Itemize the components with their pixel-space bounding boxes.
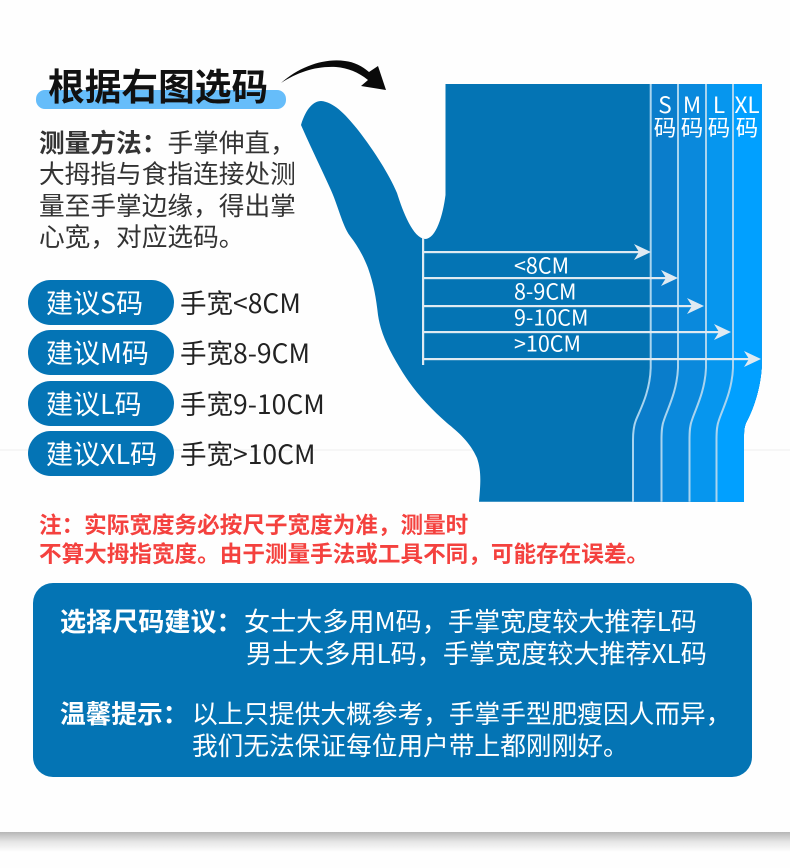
red note: 不算大拇指宽度。由于测量手法或工具不同，可能存在误差。 <box>39 536 649 568</box>
text block: measuring method <box>39 123 296 254</box>
text block: measuring method: 心宽，对应选码。 <box>39 217 244 254</box>
panel: advice: 男士大多用L码，手掌宽度较大推荐XL码 <box>246 633 707 671</box>
recommendation M: 手宽8-9CM <box>180 332 310 371</box>
tips text <box>60 694 731 763</box>
panel: advice: 以上只提供大概参考，手掌手型肥瘦因人而异， <box>192 694 731 731</box>
size labels: S <box>658 88 672 120</box>
recommendation M: 建议M码 <box>46 332 149 371</box>
size labels: XL <box>734 88 760 120</box>
range labels: >10CM <box>514 328 581 358</box>
size advice text <box>60 601 707 671</box>
bottom shadow <box>0 832 790 852</box>
text block: measuring method: 大拇指与食指连接处测 <box>39 154 296 191</box>
recommendation XL: 建议XL码 <box>46 433 157 472</box>
recommendation S <box>28 280 301 325</box>
recommendation S: 建议S码 <box>46 282 143 321</box>
recommendation L: 手宽9-10CM <box>180 383 325 422</box>
curved arrow <box>281 60 386 90</box>
size labels: 码 <box>736 111 758 143</box>
recommendation S: 手宽<8CM <box>180 282 301 321</box>
recommendation L <box>28 381 325 426</box>
arrow and hand chart <box>281 60 762 502</box>
size band S <box>633 84 762 502</box>
recommendation M <box>28 330 310 375</box>
size band XL <box>718 84 762 502</box>
size labels: 码 <box>654 111 676 143</box>
title highlight bar <box>36 90 286 109</box>
measuring arrows <box>422 238 761 367</box>
panel: advice: 我们无法保证每位用户带上都刚刚好。 <box>192 726 629 763</box>
recommendation XL <box>28 431 316 476</box>
size recommendation list <box>28 280 325 476</box>
range labels: 8-9CM <box>514 276 577 306</box>
size labels: M <box>683 88 701 120</box>
recommendation XL: 手宽>10CM <box>180 433 316 472</box>
range labels: 9-10CM <box>514 302 588 332</box>
panel: advice <box>33 583 752 777</box>
size labels: 码 <box>708 111 730 143</box>
size band L <box>690 84 762 502</box>
size band M <box>662 84 762 502</box>
size labels <box>654 88 760 143</box>
range labels: <8CM <box>514 250 569 280</box>
title: 根据右图选码 <box>48 57 268 111</box>
size advice text: 选择尺码建议： <box>60 601 243 639</box>
range labels <box>514 250 588 358</box>
red note: 注：实际宽度务必按尺子宽度为准，测量时 <box>39 507 468 540</box>
tips text: 温馨提示： <box>60 694 188 731</box>
faint horizontal band <box>0 449 790 451</box>
recommendation L: 建议L码 <box>46 383 142 422</box>
text block: measuring method: 量至手掌边缘，得出掌 <box>39 186 296 223</box>
text block: measuring method: 测量方法：手掌伸直， <box>39 123 296 160</box>
panel: advice: 女士大多用M码，手掌宽度较大推荐L码 <box>244 601 697 639</box>
red note <box>39 507 649 568</box>
size labels: 码 <box>681 111 703 143</box>
hand with size bands <box>295 80 790 510</box>
size labels: L <box>713 88 725 120</box>
